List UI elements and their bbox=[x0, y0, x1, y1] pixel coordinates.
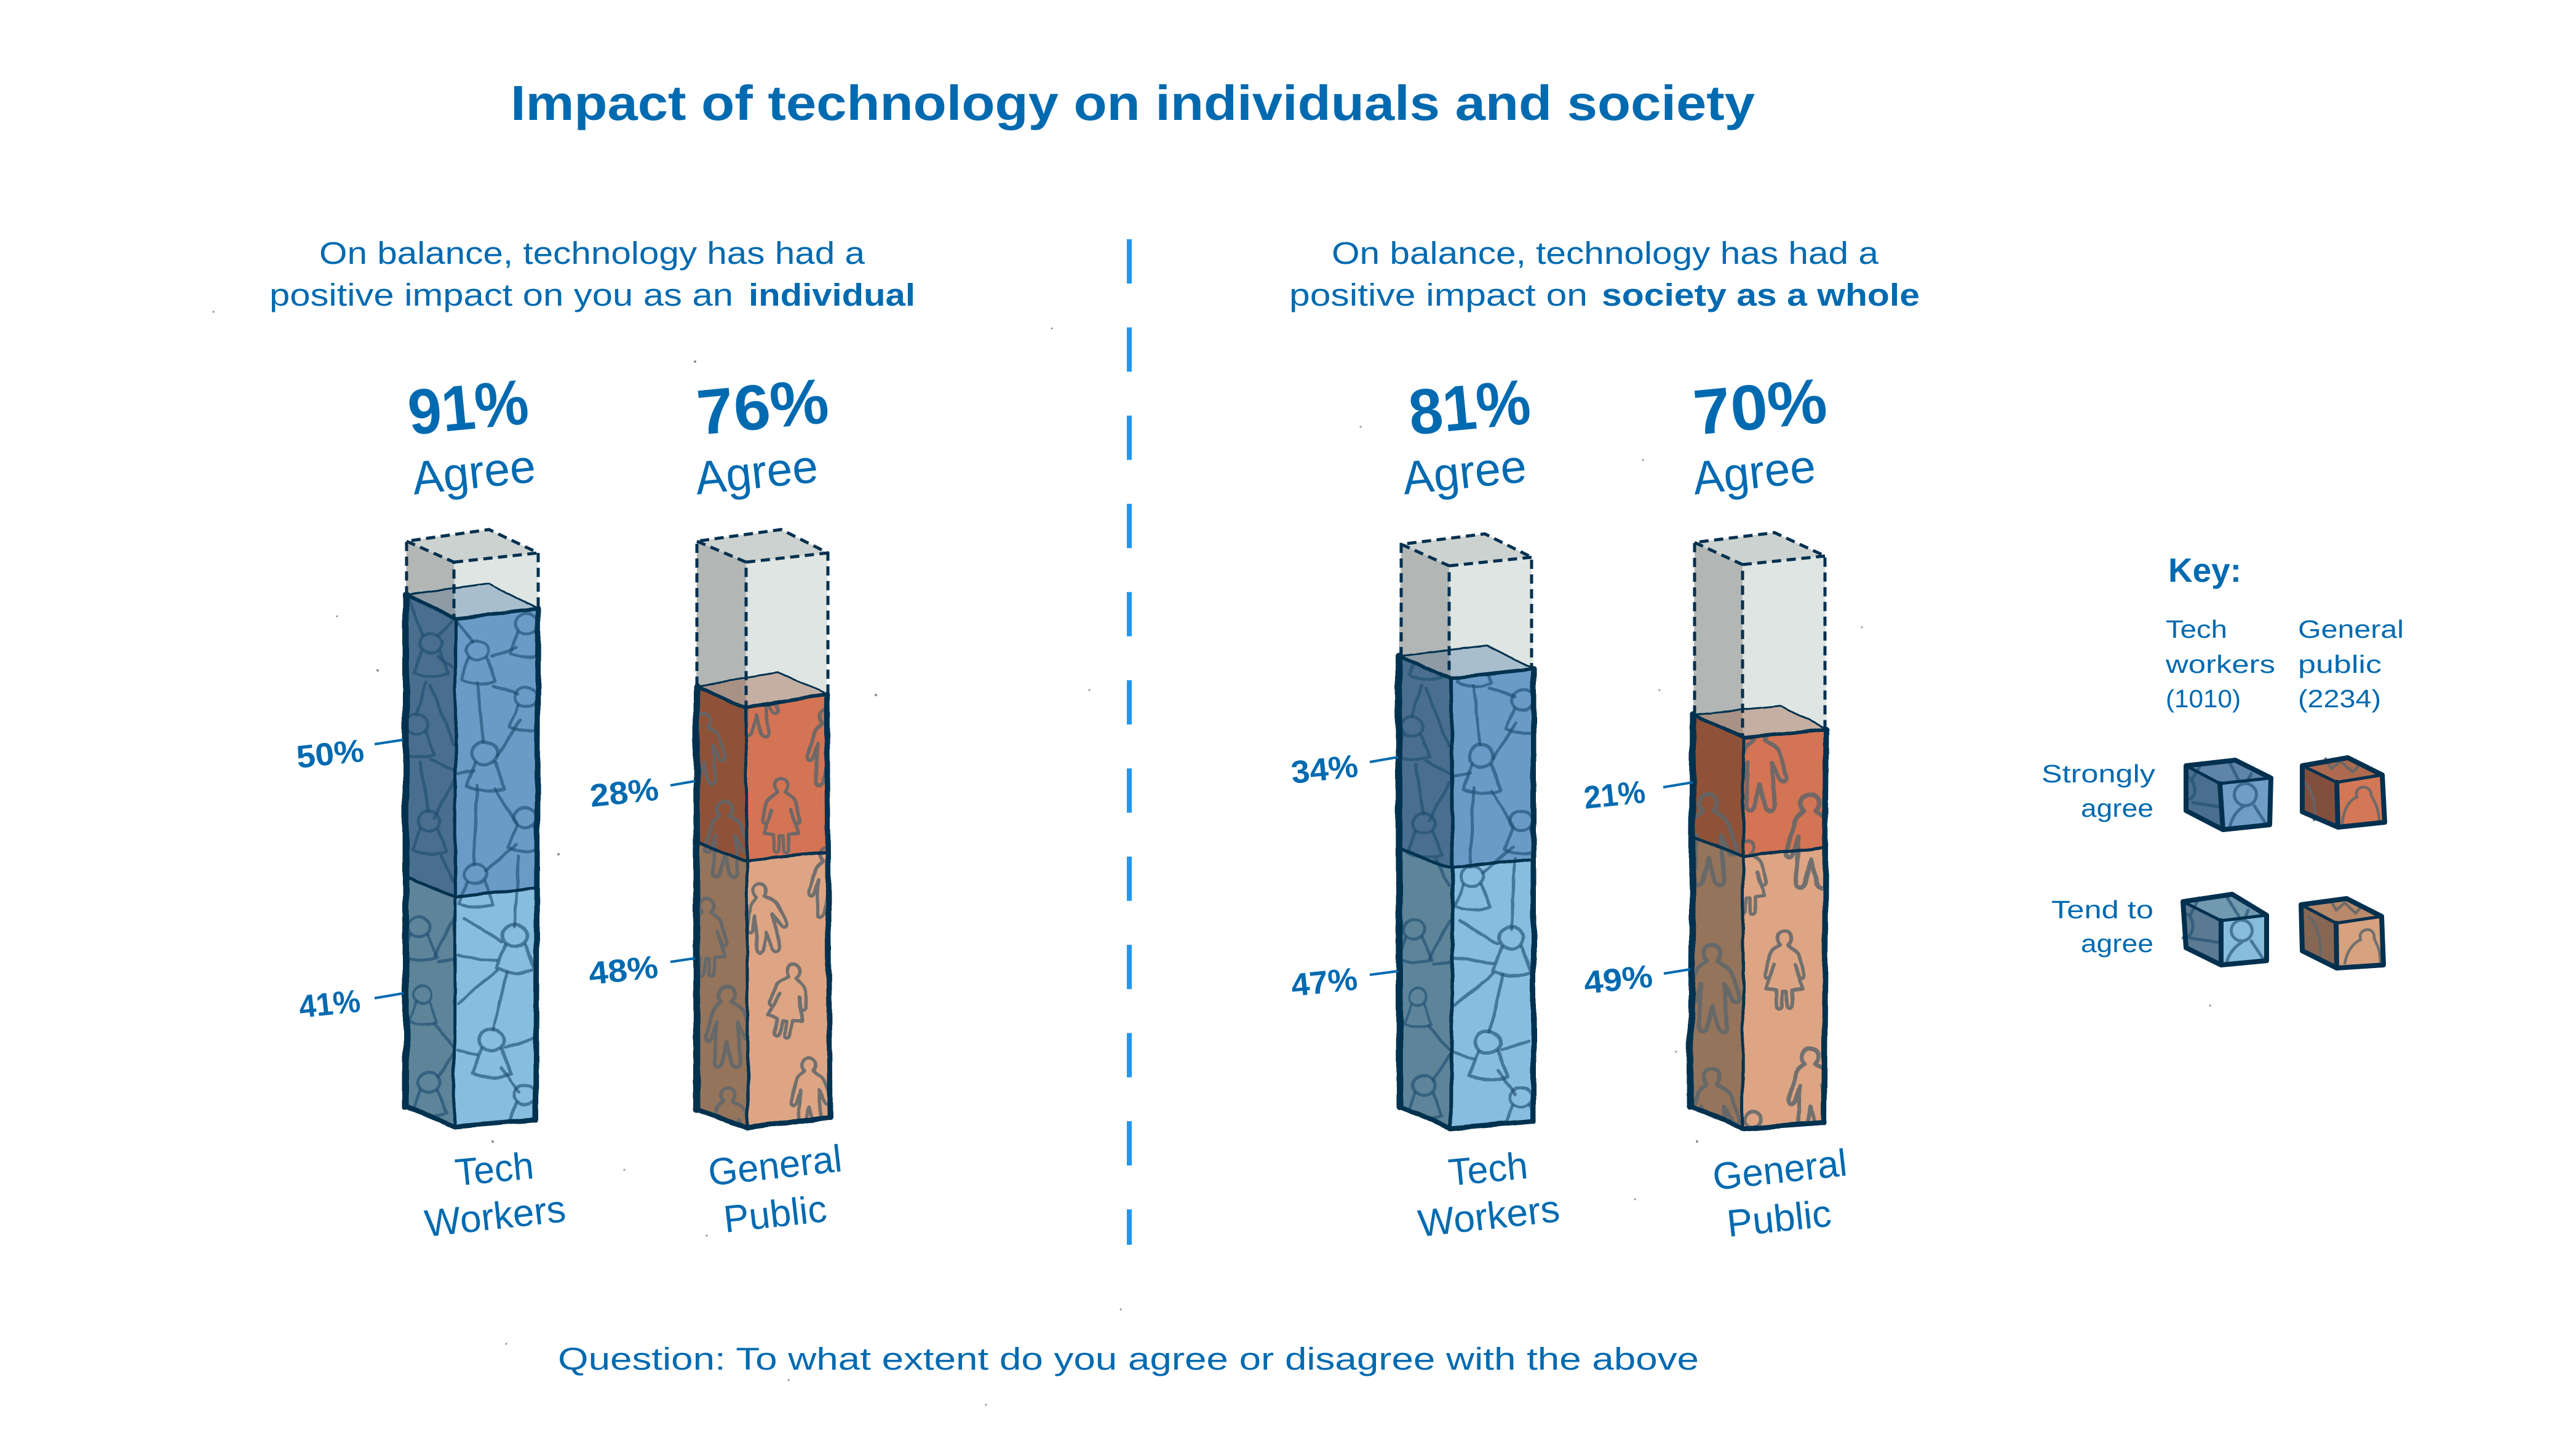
axis label: tech workers: Tech bbox=[1447, 1145, 1530, 1194]
axis label: tech workers bbox=[423, 1145, 568, 1245]
agree headline: tech workers 91%: 91% bbox=[405, 367, 531, 449]
subheading: society bbox=[1289, 236, 1920, 312]
axis label: tech workers: Workers bbox=[423, 1188, 568, 1245]
label: 50%: 50% bbox=[295, 733, 366, 776]
agree headline: tech workers 81%: Agree bbox=[1400, 440, 1529, 505]
agree headline: tech workers 81%: 81% bbox=[1405, 366, 1533, 449]
subheading: society: On balance, technology has had a bbox=[1332, 236, 1879, 271]
axis label: general public: Public bbox=[1725, 1193, 1834, 1245]
label: 48% bbox=[587, 949, 695, 992]
bar: tech workers, individual bbox=[400, 530, 544, 1128]
label: 34%: 34% bbox=[1289, 748, 1360, 791]
key column: tech workers: Tech bbox=[2166, 615, 2227, 643]
label: 47% bbox=[1289, 961, 1398, 1004]
key row: tend to agree bbox=[2051, 895, 2153, 958]
axis label: tech workers bbox=[1416, 1145, 1562, 1245]
key row: strongly agree: Strongly bbox=[2041, 760, 2156, 788]
axis label: general public bbox=[706, 1137, 844, 1241]
bar: tech workers, society bbox=[1395, 534, 1541, 1130]
icon: general public tend to agree bbox=[2301, 899, 2383, 968]
axis label: tech workers: Workers bbox=[1416, 1188, 1562, 1245]
key column: tech workers: (1010) bbox=[2166, 685, 2241, 713]
icon: general public strongly agree bbox=[2302, 758, 2385, 827]
label: 28%: 28% bbox=[588, 772, 661, 814]
key column: general public: public bbox=[2298, 650, 2382, 678]
agree headline: tech workers 91% bbox=[405, 367, 538, 505]
agree headline: general public 70% bbox=[1690, 365, 1830, 505]
icon: tech workers tend to agree bbox=[2183, 894, 2267, 965]
agree headline: general public 70%: Agree bbox=[1690, 440, 1818, 505]
agree headline: general public 76%: Agree bbox=[693, 440, 821, 505]
label: 48%: 48% bbox=[587, 949, 660, 992]
label: 41% bbox=[297, 983, 403, 1025]
key column: tech workers bbox=[2165, 615, 2275, 713]
label: 28% bbox=[588, 772, 695, 814]
label: 49%: 49% bbox=[1582, 959, 1655, 1001]
label: 21%: 21% bbox=[1582, 774, 1647, 816]
subheading: individual: positive impact on you as an bbox=[269, 277, 733, 312]
key heading: Key: bbox=[2168, 551, 2241, 589]
label: 21% bbox=[1582, 774, 1693, 816]
key column: general public: (2234) bbox=[2298, 685, 2381, 713]
panel: impact on individual bbox=[269, 236, 915, 1245]
subheading: society: positive impact on bbox=[1289, 277, 1588, 312]
label: 47%: 47% bbox=[1289, 961, 1359, 1004]
icon: tech workers strongly agree bbox=[2186, 760, 2271, 830]
label: 34% bbox=[1289, 748, 1398, 791]
label: 41%: 41% bbox=[297, 983, 362, 1025]
bar: general public, society bbox=[1685, 531, 1829, 1132]
divider bbox=[1127, 239, 1132, 1245]
key row: strongly agree: agree bbox=[2081, 794, 2153, 822]
agree headline: tech workers 81% bbox=[1400, 366, 1533, 505]
agree headline: tech workers 91%: Agree bbox=[410, 440, 538, 505]
label: 49% bbox=[1582, 959, 1690, 1001]
subheading: society: society as a whole bbox=[1602, 277, 1920, 312]
key column: general public bbox=[2298, 615, 2404, 713]
subheading: individual bbox=[269, 236, 915, 312]
title: Impact of technology on individuals and society bbox=[511, 76, 1755, 130]
agree headline: general public 76% bbox=[693, 365, 832, 505]
agree headline: general public 70%: 70% bbox=[1690, 365, 1830, 449]
subheading: individual: individual bbox=[749, 277, 915, 312]
axis label: general public: General bbox=[706, 1137, 844, 1194]
key column: tech workers: workers bbox=[2165, 650, 2275, 678]
key row: strongly agree bbox=[2041, 760, 2156, 822]
bar: general public, individual bbox=[685, 530, 852, 1158]
subheading: individual: On balance, technology has had a bbox=[319, 236, 865, 271]
key row: tend to agree: agree bbox=[2081, 929, 2153, 958]
panel: impact on society bbox=[1289, 236, 1920, 1245]
key bbox=[2041, 551, 2404, 968]
axis label: general public: Public bbox=[722, 1188, 829, 1241]
axis label: general public: General bbox=[1711, 1141, 1849, 1199]
axis label: tech workers: Tech bbox=[453, 1145, 536, 1194]
label: 50% bbox=[295, 733, 403, 776]
agree headline: general public 76%: 76% bbox=[694, 365, 832, 449]
key column: general public: General bbox=[2298, 615, 2404, 643]
key row: tend to agree: Tend to bbox=[2051, 895, 2153, 924]
question text: Question: To what extent do you agree or disagree with the above bbox=[558, 1341, 1699, 1376]
axis label: general public bbox=[1711, 1141, 1849, 1245]
